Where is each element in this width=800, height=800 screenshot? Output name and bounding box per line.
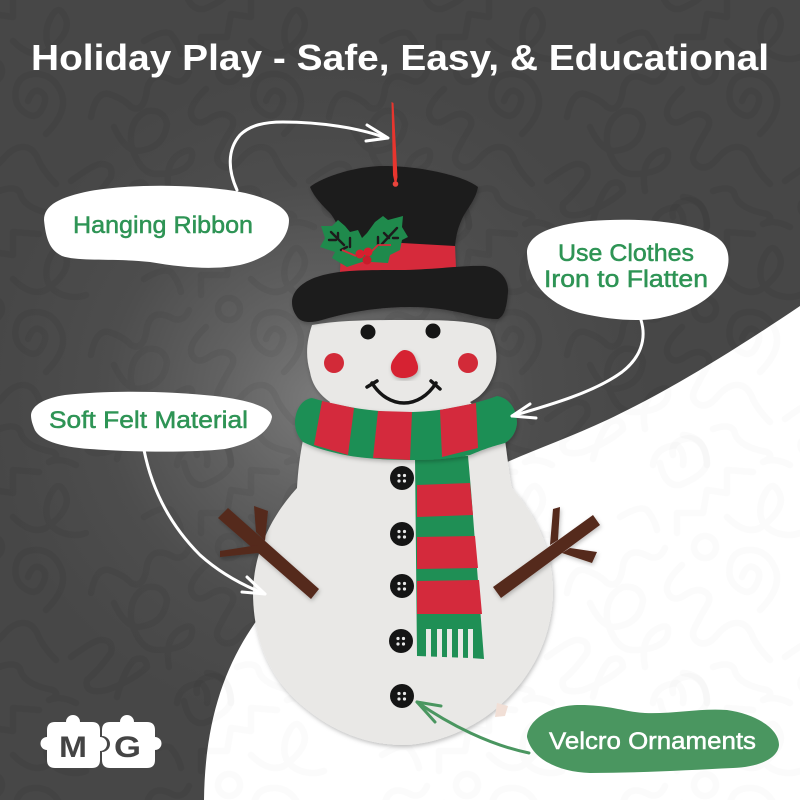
callout: iron to flatten [527,220,728,320]
callout: velcro ornaments: Velcro Ornaments [549,728,756,755]
top hat [292,166,508,322]
smile [367,381,440,403]
left twig arm [218,506,319,599]
hanging ribbon [392,102,398,187]
cheeks [324,353,344,373]
nose [391,350,418,378]
hat brim [292,266,508,322]
scarf tail [415,456,484,659]
scarf fringe [426,629,473,659]
arrow: to hanging ribbon [230,122,388,190]
callout: velcro ornaments [527,705,779,773]
hat band [340,243,456,272]
logo: MG puzzle pieces [41,715,162,768]
arrow: to soft felt body [144,450,265,594]
scarf collar [295,396,517,460]
holly veins [329,228,398,250]
right twig arm [493,507,600,598]
snowman [218,102,600,745]
callout: soft felt material [31,392,272,452]
background: white swoosh with pattern [204,306,800,800]
snowman body [253,320,553,745]
logo: MG puzzle pieces: M [59,731,87,764]
arrow: to velcro button [417,702,529,753]
arrow: to scarf [512,320,643,418]
face [324,324,478,403]
callout: hanging ribbon: Hanging Ribbon [73,212,253,239]
callout: soft felt material: Soft Felt Material [49,407,248,434]
callout: hanging ribbon [44,186,289,268]
eyes [360,324,376,340]
callout: iron to flatten: Iron to Flatten [544,266,708,293]
title: Holiday Play - Safe, Easy, & Educational [31,37,769,78]
care label tag [495,703,508,717]
logo: MG puzzle pieces: G [114,731,141,764]
callout: iron to flatten: Use Clothes [558,240,694,267]
holly berries [356,250,364,258]
buttons [389,466,414,708]
holly leaves [320,216,408,267]
